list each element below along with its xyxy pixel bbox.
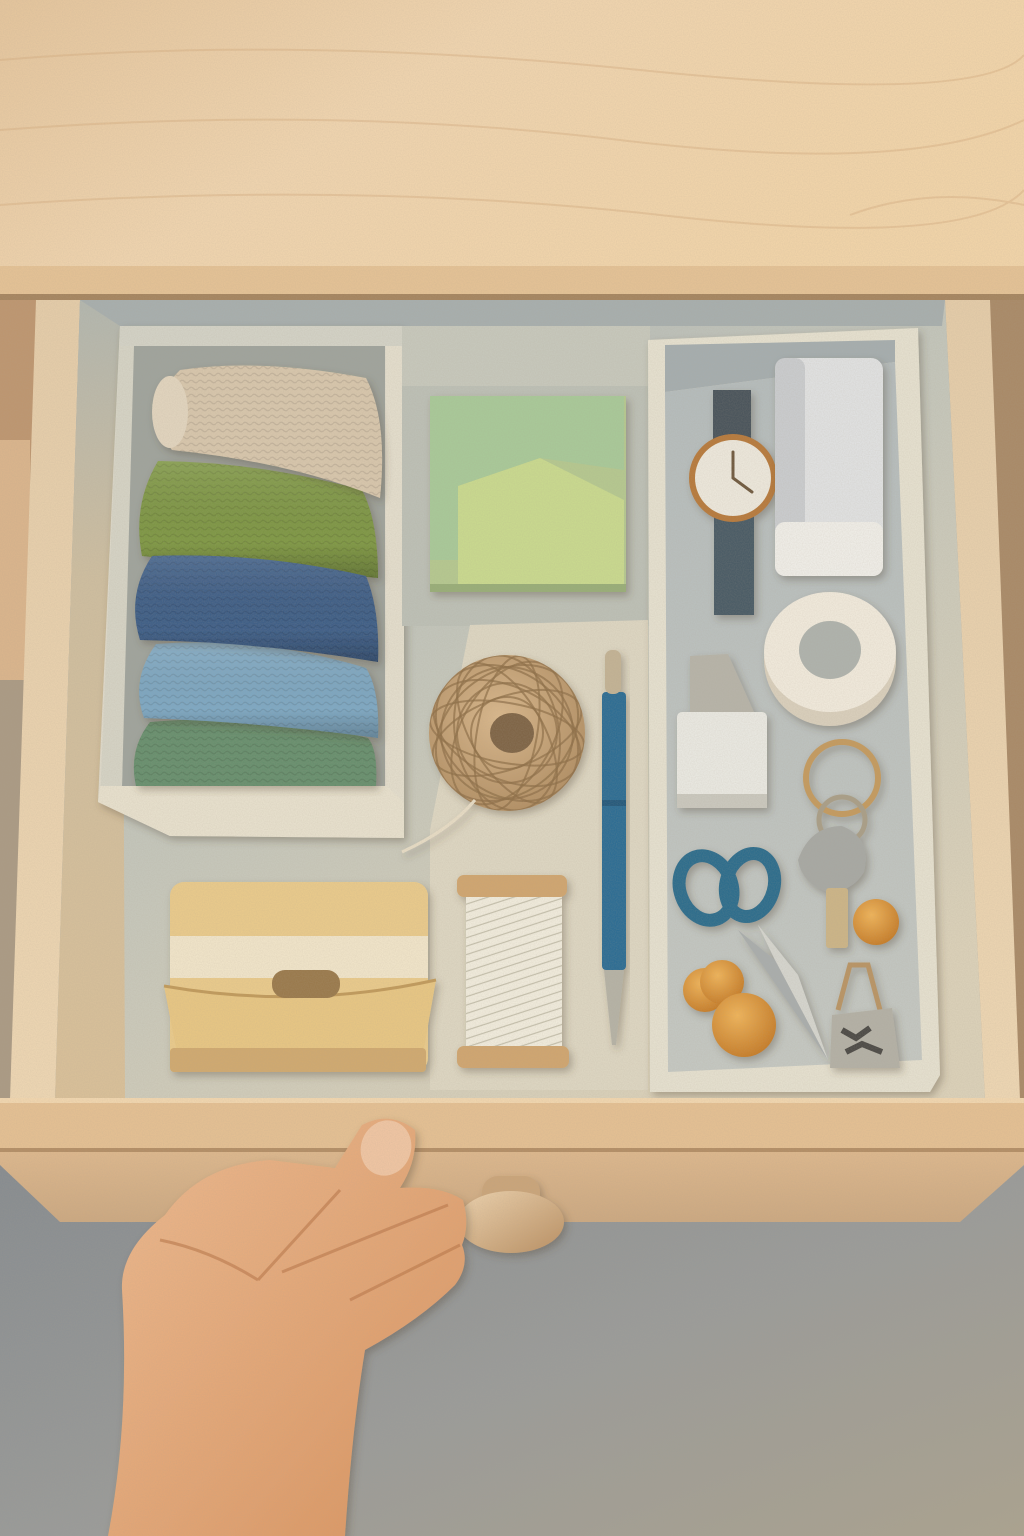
coins	[683, 899, 899, 1057]
drawer knob	[458, 1176, 564, 1253]
floor below the drawer	[0, 1150, 1024, 1536]
white eraser block	[775, 358, 883, 576]
pen	[602, 650, 626, 1045]
rolled socks	[134, 366, 382, 786]
organizer: right compartment	[648, 328, 940, 1092]
drawer interior	[10, 300, 1020, 1100]
hand pulling drawer	[108, 1113, 466, 1536]
binder clip	[830, 965, 900, 1068]
spool of thread	[457, 875, 569, 1068]
wooden desk top	[0, 0, 1024, 300]
cabinet side walls	[0, 295, 1024, 1155]
key ring and key	[798, 742, 878, 948]
sock: beige	[152, 366, 382, 498]
organizer: sock compartment	[98, 326, 404, 838]
wristwatch	[689, 390, 777, 615]
roll of tape	[764, 592, 896, 726]
drawer front panel	[0, 1098, 1024, 1222]
twine ball	[402, 654, 592, 858]
organizer: centre dividers	[402, 326, 650, 1090]
sock: green	[139, 461, 378, 578]
sock: light blue	[139, 642, 378, 738]
scissors	[670, 848, 828, 1060]
sock: sage	[134, 719, 376, 786]
sock: navy	[135, 555, 378, 662]
tissue pouch	[164, 882, 436, 1072]
binder block	[677, 654, 767, 808]
sticky notes	[430, 396, 626, 592]
